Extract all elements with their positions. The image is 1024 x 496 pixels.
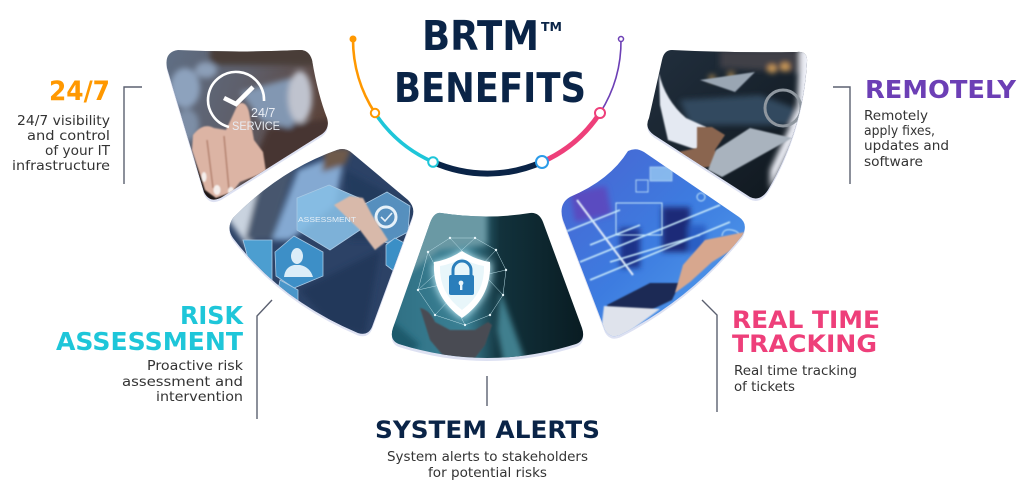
panel: risk assessment photo (225, 145, 420, 340)
title: BRTM Benefits: BENEFITS (394, 64, 586, 112)
hand (678, 127, 725, 168)
panel: 24/7 service photo (166, 50, 328, 202)
panel: system alerts photo (392, 212, 584, 361)
keyboard (606, 282, 679, 310)
hexagon icons (243, 185, 410, 312)
text block: 24/7 (12, 76, 111, 174)
icon: clock (208, 72, 264, 127)
tablet (708, 128, 792, 177)
title: BRTM Benefits (394, 12, 586, 112)
text block: remotely: updates and (864, 138, 949, 154)
text block: system alerts: for potential risks (428, 465, 547, 481)
network dots (418, 238, 506, 325)
sleeve (659, 73, 706, 150)
screen streaks (565, 167, 739, 280)
chart overlay (700, 72, 755, 92)
icon: person (284, 248, 313, 277)
connector: system alerts (486, 376, 488, 406)
text block: risk assessment: Proactive risk (147, 358, 243, 374)
text block: system alerts: SYSTEM ALERTS (375, 416, 600, 444)
text block: risk assessment: ASSESSMENT (56, 327, 243, 356)
text block: remotely: REMOTELY (865, 75, 1017, 104)
laptop edge (600, 306, 660, 340)
hand (334, 196, 388, 250)
text block: risk assessment: assessment and (122, 374, 243, 390)
connector: 24/7 (124, 87, 142, 184)
hand (192, 103, 266, 198)
text block: real time tracking: REAL TIME (732, 306, 880, 334)
text block: real time tracking: of tickets (734, 379, 795, 395)
text block: 24/7: and control (27, 128, 110, 144)
text block: remotely: Remotely (864, 108, 928, 124)
arc: coloured timeline (350, 36, 624, 174)
icon: shield and lock (433, 250, 491, 319)
text block: 24/7: 24/7 (49, 76, 110, 107)
title: BRTM Benefits: BRTM (422, 12, 539, 60)
text block: risk assessment: RISK (180, 301, 245, 330)
gauge ring (765, 90, 801, 126)
text block: remotely: apply fixes, (864, 123, 935, 139)
text block: risk assessment (56, 301, 245, 405)
photo label: 24/7 service (232, 108, 280, 130)
hand (675, 232, 745, 293)
panel: real time tracking photo (555, 145, 750, 340)
text block: real time tracking: Real time tracking (734, 363, 857, 379)
text block: risk assessment: intervention (156, 389, 243, 405)
connector: remotely (833, 87, 850, 184)
text block: remotely: software (864, 154, 923, 170)
text block: system alerts (375, 416, 600, 481)
text block: 24/7: of your IT (45, 143, 111, 159)
text block: 24/7: 24/7 visibility (17, 113, 110, 129)
text block: system alerts: System alerts to stakeholders (387, 449, 588, 465)
panel: remotely photo (647, 50, 808, 201)
icon: hand (420, 308, 492, 358)
photo label: 24/7 service: SERVICE (232, 121, 280, 133)
photo label: assessment: ASSESSMENT (298, 215, 356, 224)
text block: 24/7: infrastructure (12, 158, 110, 174)
title: BRTM Benefits: TM (541, 19, 562, 34)
text block: remotely (864, 75, 1017, 170)
text block: real time tracking: TRACKING (732, 330, 877, 358)
icon: gear check (376, 207, 396, 227)
connector: risk assessment (257, 300, 272, 419)
connector: real time tracking (702, 300, 717, 412)
text block: real time tracking (732, 306, 880, 395)
photo label: 24/7 service: 24/7 (251, 106, 275, 120)
